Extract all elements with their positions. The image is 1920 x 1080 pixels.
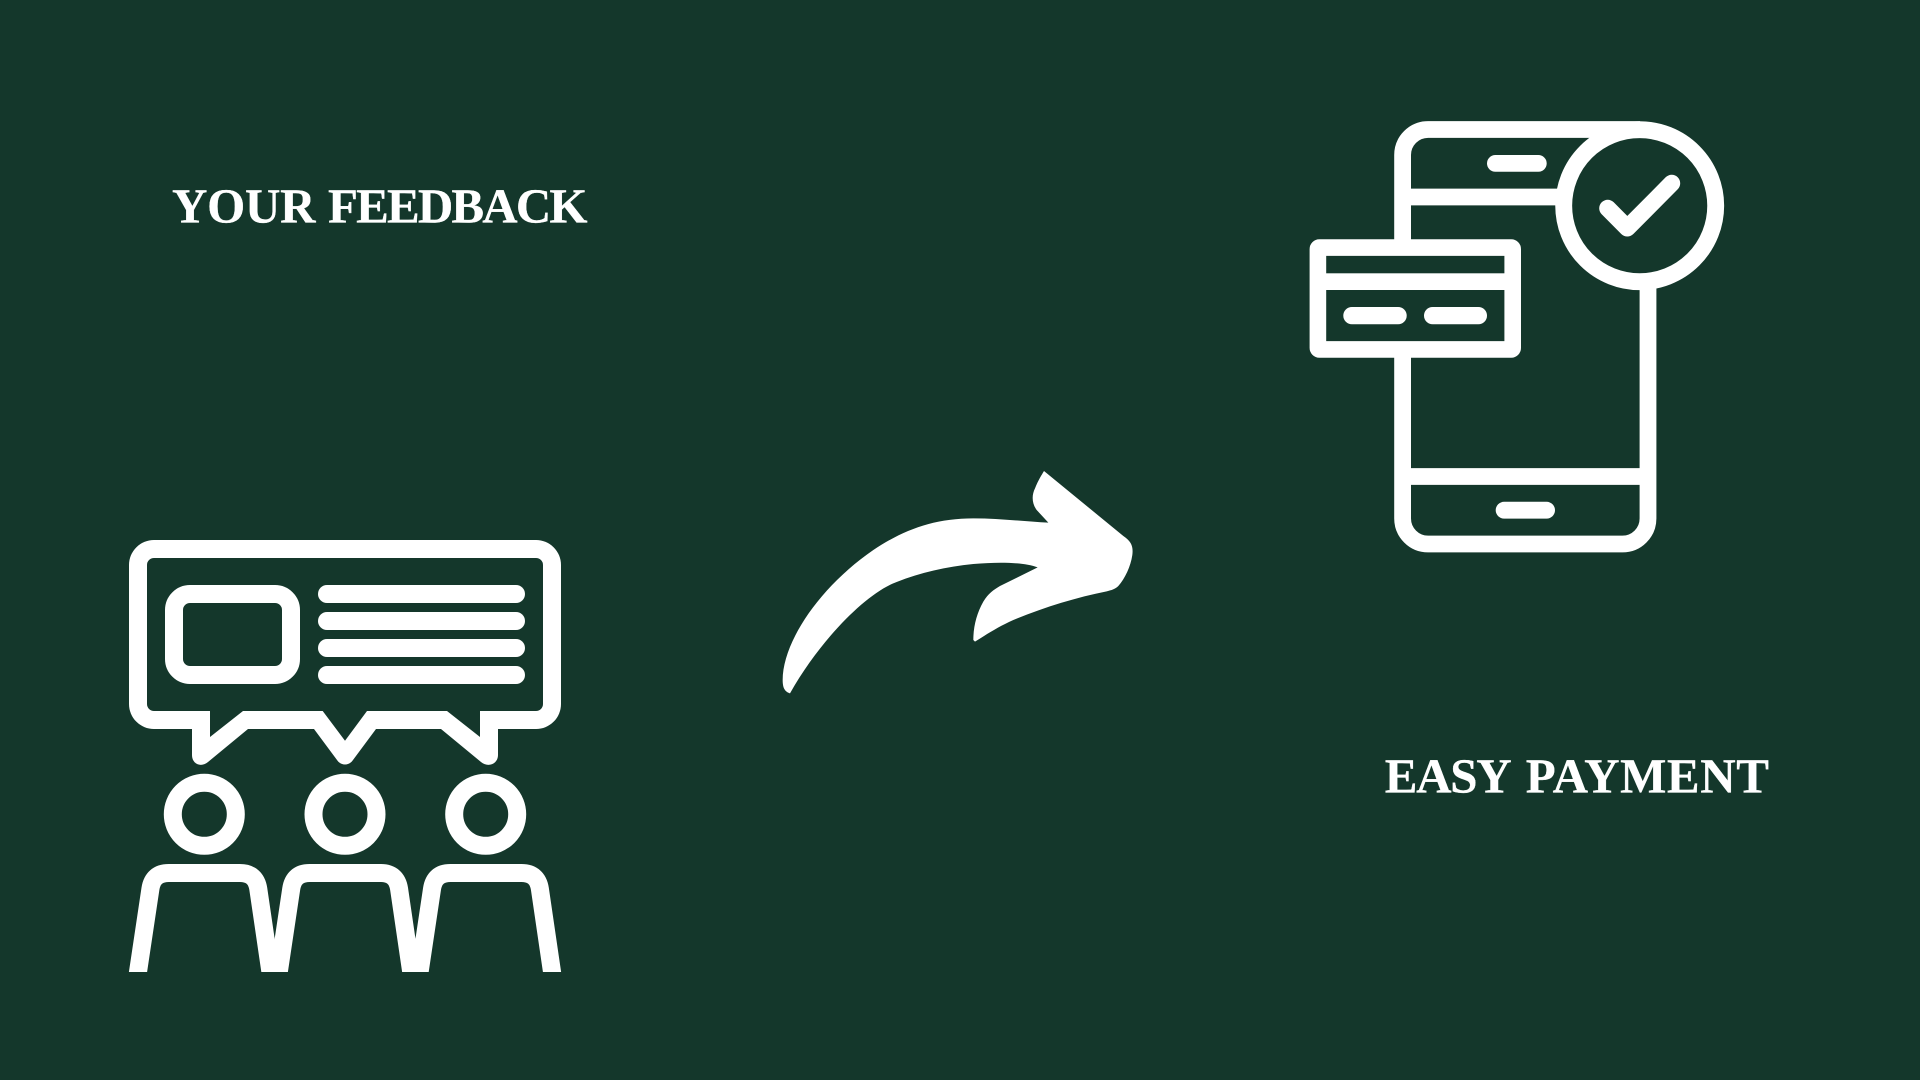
- check badge circle: [1564, 130, 1716, 282]
- card pills: [1343, 307, 1487, 324]
- heading: easy payment: [1385, 748, 1769, 804]
- check mark: [1608, 183, 1672, 228]
- heading: your feedback: YOUR: [172, 178, 316, 234]
- infographic canvas: [128, 121, 1768, 972]
- icon: phone with card and check mark: [1318, 130, 1716, 544]
- arrow: curved arrow pointing right: [783, 471, 1133, 693]
- card stripe: [1318, 273, 1513, 290]
- phone top and bottom bars: [1403, 197, 1648, 476]
- icon: group giving feedback: [129, 540, 561, 980]
- heading: your feedback: FEEDBACK: [328, 178, 588, 234]
- credit card: [1318, 248, 1513, 349]
- picture placeholder in bubble: [174, 594, 291, 675]
- phone speaker pill: [1487, 155, 1547, 172]
- text lines in bubble: [318, 585, 525, 684]
- phone home pill: [1496, 502, 1555, 519]
- phone outline: [1403, 130, 1648, 544]
- person heads: [173, 783, 517, 846]
- heading: easy payment: EASY: [1385, 748, 1512, 804]
- speech bubble with three tails: [129, 540, 561, 765]
- heading: your feedback: [172, 178, 588, 234]
- person bodies: [137, 873, 553, 980]
- heading: easy payment: PAYMENT: [1526, 748, 1769, 804]
